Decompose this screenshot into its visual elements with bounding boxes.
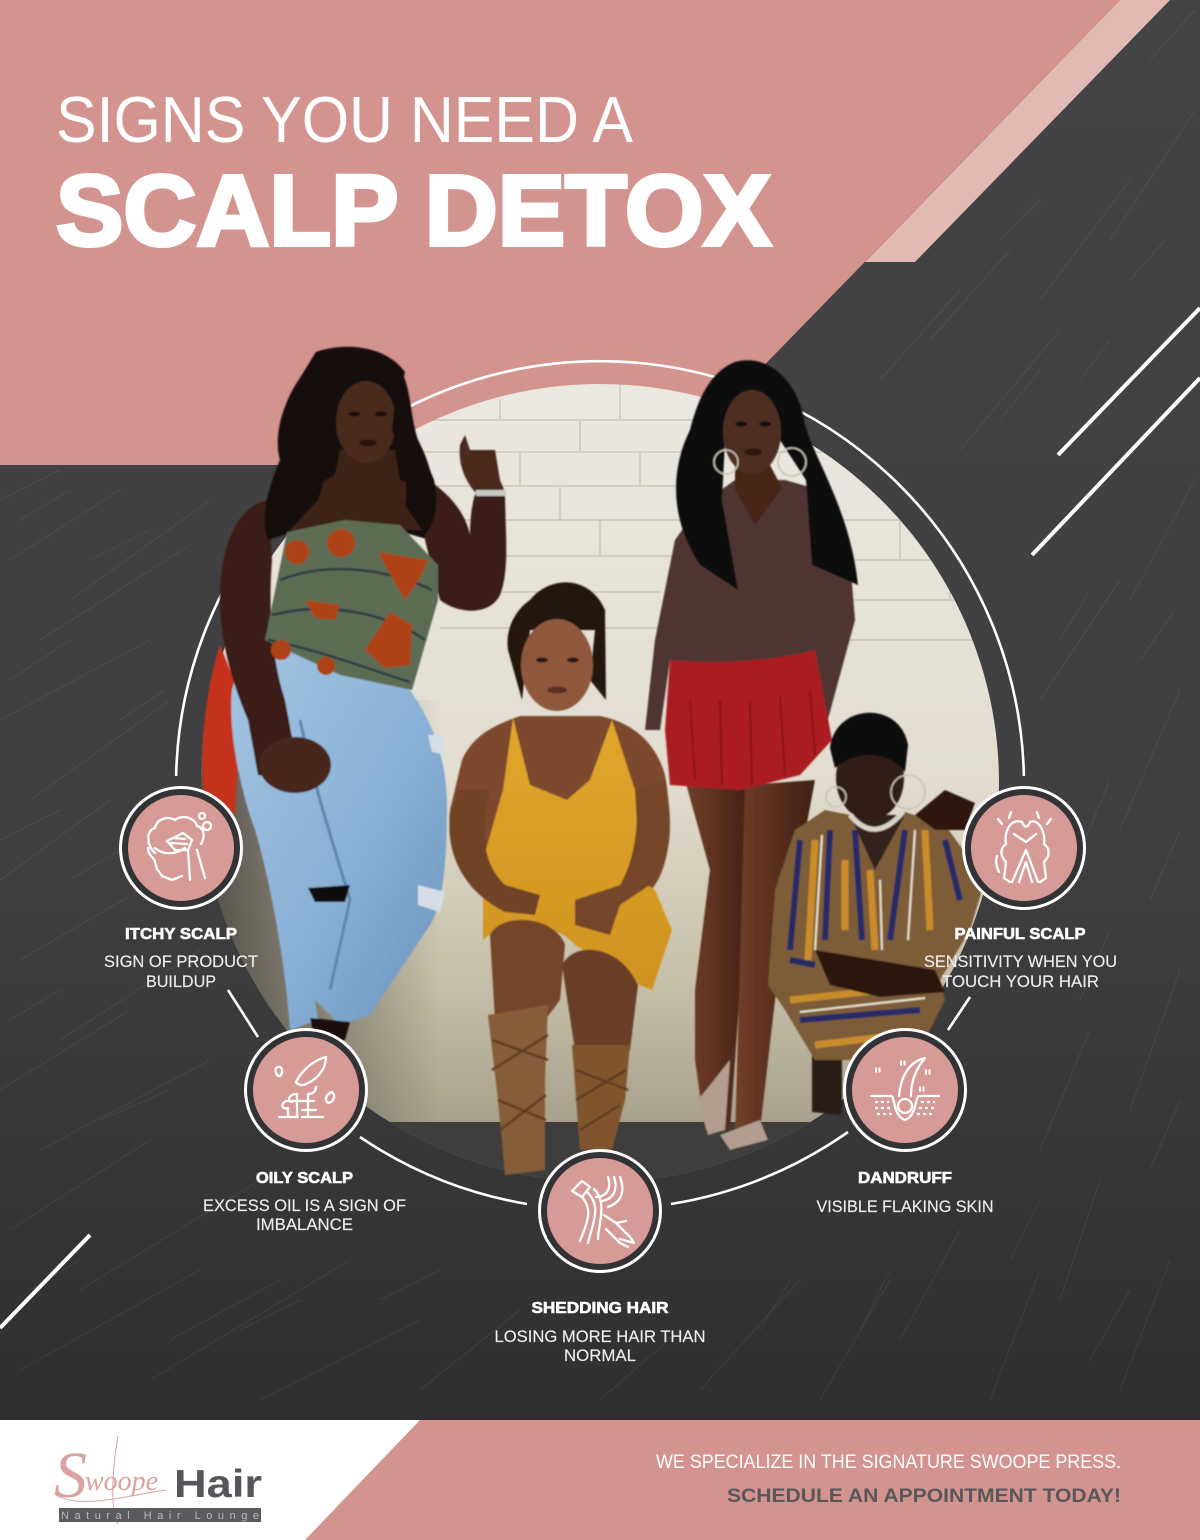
timeline ring arcs [176, 361, 1024, 1204]
logo: Swoope Hair [54, 1436, 262, 1524]
text: oily scalp: IMBALANCE [256, 1215, 353, 1234]
footer call to action: WE SPECIALIZE IN THE SIGNATURE SWOOPE PRESS. [656, 1452, 1121, 1473]
footer white logo panel [0, 1420, 420, 1540]
text: painful scalp: SENSITIVITY WHEN YOU [924, 952, 1117, 971]
text: painful scalp: PAINFUL SCALP [954, 926, 1086, 943]
icon: hand washing hair [120, 788, 242, 908]
icon: oily hair [246, 1030, 366, 1150]
footer pink band [0, 1420, 1200, 1540]
text: oily scalp: OILY SCALP [256, 1170, 353, 1187]
text: itchy scalp: SIGN OF PRODUCT [104, 952, 258, 971]
text: itchy scalp [104, 926, 258, 991]
woman: crouching right, patterned dress [768, 713, 985, 1115]
icon: hands on painful head [964, 788, 1084, 908]
pink header block [0, 0, 1120, 465]
text: itchy scalp: BUILDUP [146, 972, 216, 991]
photo: four women [202, 347, 985, 1175]
text: shedding hair [494, 1300, 706, 1365]
icon: hair follicle with flakes [844, 1030, 966, 1150]
woman: left, patterned top and jeans [202, 347, 506, 1040]
logo: Swoope Hair: Hair [174, 1463, 262, 1506]
icon: hair strands in hand [540, 1150, 660, 1272]
text: painful scalp [924, 926, 1117, 991]
text: shedding hair: SHEDDING HAIR [532, 1300, 669, 1317]
title: SCALP DETOX [56, 155, 771, 267]
light pink diagonal strip [865, 0, 1170, 262]
woman: seated centre, yellow dress [449, 582, 672, 1175]
text: oily scalp [203, 1170, 406, 1234]
text: dandruff: VISIBLE FLAKING SKIN [816, 1197, 994, 1216]
title [56, 83, 771, 267]
step: dandruff [816, 1030, 994, 1216]
photo wall backdrop [200, 380, 1000, 1182]
step: painful scalp [924, 788, 1117, 991]
woman: standing right, braids and red skirt [645, 360, 858, 1150]
text: oily scalp: EXCESS OIL IS A SIGN OF [203, 1196, 406, 1215]
logo: Swoope Hair: S [54, 1439, 87, 1512]
white diagonal accent lines [0, 308, 1200, 1328]
text: dandruff: DANDRUFF [858, 1170, 952, 1187]
text: itchy scalp: ITCHY SCALP [125, 926, 237, 943]
logo: Swoope Hair: Natural Hair Lounge [61, 1510, 259, 1522]
footer call to action [656, 1452, 1121, 1507]
step: oily scalp [203, 1030, 406, 1234]
footer call to action: SCHEDULE AN APPOINTMENT TODAY! [727, 1486, 1121, 1507]
text: dandruff [816, 1170, 994, 1216]
step: itchy scalp [104, 788, 258, 991]
text: painful scalp: TOUCH YOUR HAIR [942, 972, 1099, 991]
text: shedding hair: NORMAL [564, 1346, 636, 1365]
title: SIGNS YOU NEED A [56, 83, 634, 156]
logo: Swoope Hair: woope [85, 1466, 158, 1497]
text: shedding hair: LOSING MORE HAIR THAN [494, 1327, 706, 1346]
step: shedding hair [494, 1150, 706, 1365]
